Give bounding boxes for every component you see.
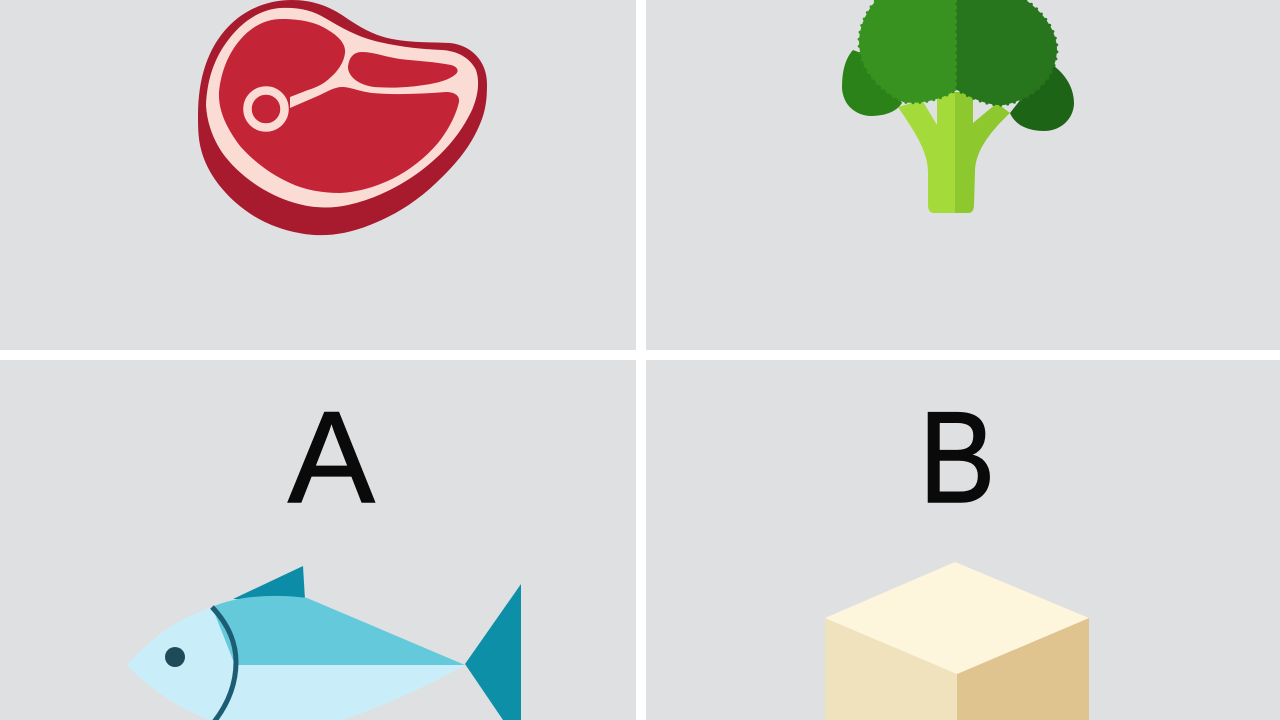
icon: steak <box>198 0 487 235</box>
icon: tofu cube <box>825 562 1089 720</box>
panel: option A fish <box>0 360 636 720</box>
label: A: A <box>288 384 375 530</box>
icon: fish <box>127 566 521 720</box>
panel: top right broccoli <box>646 0 1280 350</box>
panel: top left meat <box>0 0 636 350</box>
panel: option B tofu <box>646 360 1280 720</box>
label: B: B <box>919 384 995 530</box>
icon: broccoli <box>842 0 1074 213</box>
